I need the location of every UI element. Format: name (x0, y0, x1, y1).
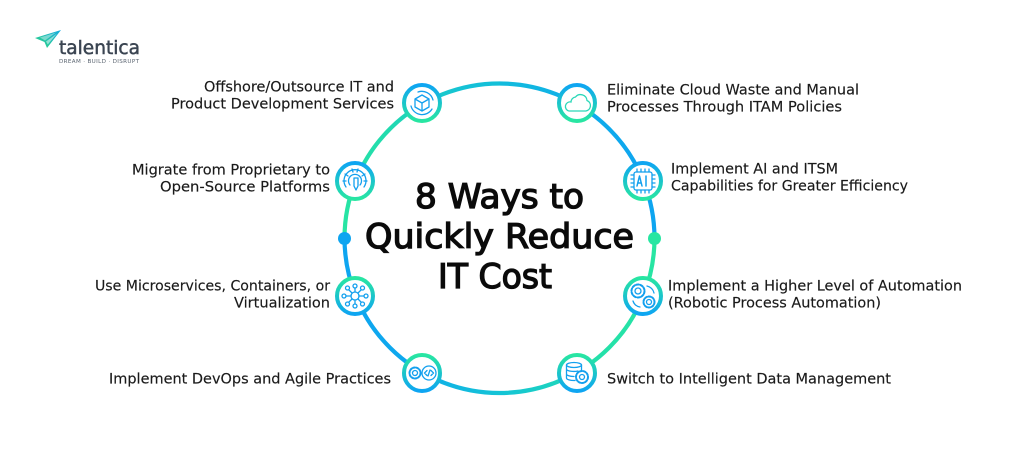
item: microservices (95, 278, 373, 314)
item: AI (625, 162, 908, 199)
title (365, 177, 634, 296)
icon: cube (404, 85, 440, 121)
icon: cloud (559, 85, 595, 121)
ring dot: left (338, 232, 351, 245)
item: devops (109, 355, 440, 391)
ring: circular path (344, 84, 654, 393)
label: Offshore/Outsource IT and (204, 80, 394, 96)
item: microservices: Virtualization (234, 296, 330, 312)
icon: database and gear (559, 355, 595, 391)
item: offshore (171, 80, 440, 121)
item: AI: Capabilities for Greater Efficiency (671, 178, 908, 194)
icon: network hub (337, 278, 373, 314)
label: Implement a Higher Level of Automation (668, 278, 962, 294)
icon: AI chip (625, 163, 661, 199)
item: open source (132, 162, 373, 199)
item: automation: (Robotic Process Automation) (668, 296, 881, 312)
ring dot: right (648, 232, 661, 245)
item: open source: Open-Source Platforms (160, 180, 330, 196)
item: data (559, 355, 892, 391)
title: Quickly Reduce (365, 217, 634, 256)
logo: talentica (35, 30, 140, 65)
title: IT Cost (438, 257, 552, 296)
item: cloud (559, 82, 859, 121)
label: Implement AI and ITSM (671, 162, 838, 178)
icon: devops loop (404, 355, 440, 391)
item: offshore: Product Development Services (171, 96, 394, 112)
label: Use Microservices, Containers, or (95, 278, 330, 294)
label: Switch to Intelligent Data Management (607, 372, 892, 388)
icon: gear with cursor (337, 163, 373, 199)
item: cloud: Processes Through ITAM Policies (607, 100, 842, 116)
icon: two gears (625, 278, 661, 314)
logo wordmark: talentica (59, 37, 140, 59)
label: Migrate from Proprietary to (132, 162, 330, 178)
icon: paper plane (35, 30, 61, 48)
title: 8 Ways to (415, 177, 584, 216)
logo tagline: DREAM · BUILD · DISRUPT (59, 59, 140, 65)
label: Implement DevOps and Agile Practices (109, 372, 391, 388)
label: Eliminate Cloud Waste and Manual (607, 82, 859, 98)
item: automation (625, 278, 962, 314)
